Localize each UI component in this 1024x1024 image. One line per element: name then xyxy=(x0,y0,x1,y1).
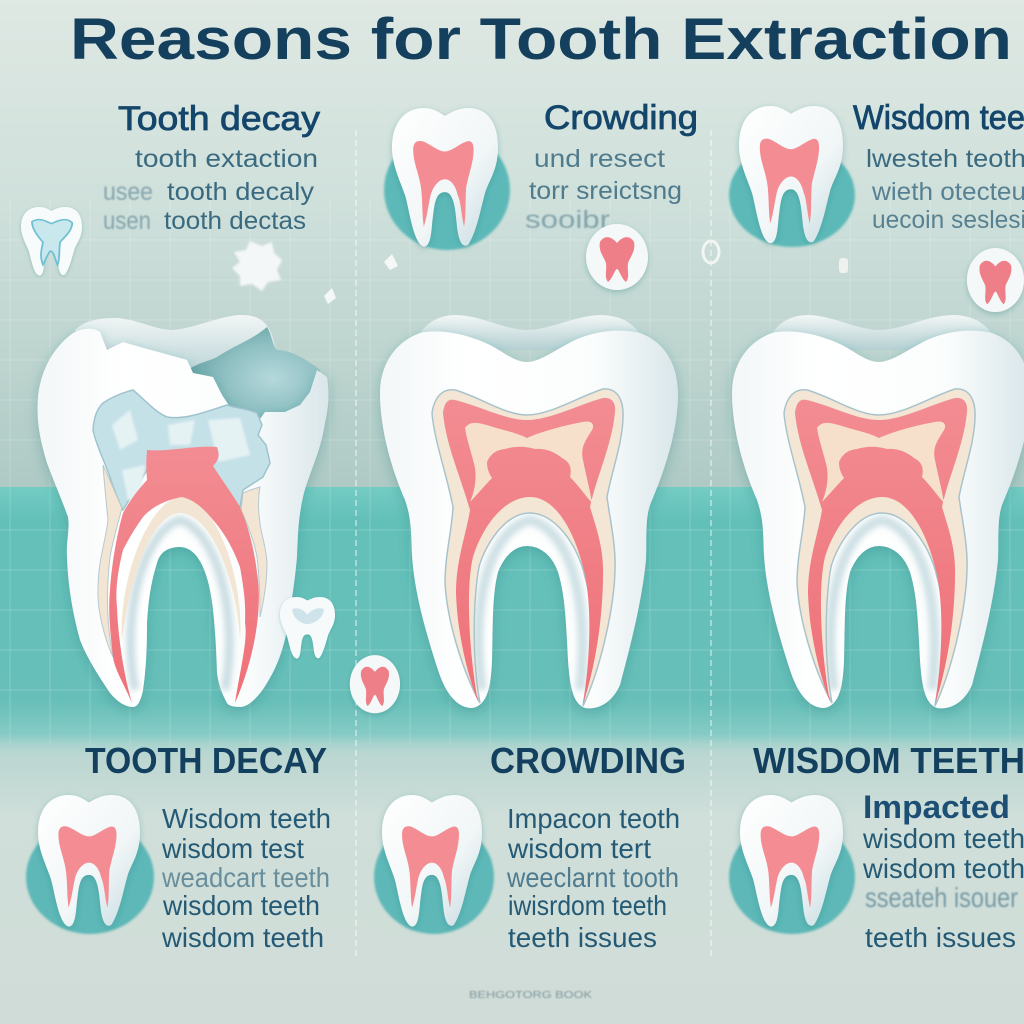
text: list: teeth issues xyxy=(865,922,1016,953)
heading: TOOTH DECAY: TOOTH DECAY xyxy=(85,740,327,781)
back crown xyxy=(75,315,285,380)
illustration: crowding tooth xyxy=(380,315,678,708)
text: crowding description: und resect xyxy=(534,145,665,173)
text: list: Wisdom teeth xyxy=(162,803,331,834)
icon: tooth with teal circle xyxy=(384,108,510,250)
inner arch shading xyxy=(131,520,229,690)
icon: small blue tooth xyxy=(21,207,82,276)
text: list: wisdom teoth xyxy=(862,853,1024,884)
text: list: weeclarnt tooth xyxy=(506,862,679,893)
heading: crowding: Crowding xyxy=(544,99,698,137)
text: crowding description: sooibr xyxy=(525,206,610,234)
text: wisdom teeth description: wieth otecteu xyxy=(871,178,1024,206)
text: list: wisdom teeth xyxy=(162,890,320,921)
decayed dentin region xyxy=(93,390,270,510)
text: wisdom teeth description xyxy=(866,145,1024,234)
panel: tooth decay top text xyxy=(103,100,320,235)
text: list: Impacon teoth xyxy=(507,803,680,834)
text: list: Impacted xyxy=(863,789,1010,825)
text: list xyxy=(862,789,1024,953)
pulp xyxy=(109,447,259,703)
text: crowding description xyxy=(525,145,682,234)
decay texture xyxy=(112,410,250,500)
heading: CROWDING: CROWDING xyxy=(490,740,686,781)
beige dentin slivers xyxy=(98,465,122,657)
tooth body xyxy=(37,329,328,707)
text: list: wisdom test xyxy=(161,833,304,864)
icon: small fragment xyxy=(384,254,398,270)
title: Reasons for Tooth Extraction xyxy=(70,7,1012,72)
text: wisdom teeth description: lwesteh teoth xyxy=(866,145,1024,173)
icon: tooth with teal circle xyxy=(729,106,855,247)
text: list xyxy=(506,803,680,953)
text: list: weadcart teeth xyxy=(161,862,330,893)
text: list: wisdom teeth xyxy=(862,823,1024,854)
panel: wisdom teeth lower xyxy=(729,740,1024,953)
icon: ring mark xyxy=(703,241,719,263)
icon: pink mini tooth xyxy=(586,224,648,290)
arch beige xyxy=(122,497,241,640)
icon: small white tooth xyxy=(280,597,335,659)
icon: pink mini tooth xyxy=(350,655,400,713)
panel: wisdom teeth top xyxy=(729,99,1024,247)
icon: tooth fragment xyxy=(232,241,282,291)
icon: small fragment xyxy=(324,288,336,304)
icon: small fragment xyxy=(839,258,848,273)
panel: tooth decay lower xyxy=(26,740,331,953)
text: tooth decay description: tooth dectas xyxy=(164,207,306,235)
footer text: BEHGOTORG BOOK xyxy=(469,990,592,1001)
text: list: teeth issues xyxy=(508,922,657,953)
text: tooth decay description xyxy=(103,145,318,235)
text: crowding description: torr sreictsng xyxy=(529,177,682,205)
icon: tooth xyxy=(374,795,494,934)
panel: crowding top xyxy=(384,99,698,250)
heading: tooth decay: Tooth decay xyxy=(118,100,320,138)
illustration: decayed tooth xyxy=(37,315,328,707)
panel: crowding lower xyxy=(374,740,686,953)
text: list xyxy=(161,803,331,953)
illustration: wisdom tooth xyxy=(732,315,1024,708)
text: tooth decay description: usee xyxy=(103,178,153,206)
icon: tooth xyxy=(26,795,154,934)
text: list: wisdom tert xyxy=(507,833,651,864)
text: tooth decay description: tooth extaction xyxy=(135,145,318,173)
decay cavity, upper right xyxy=(185,327,320,420)
text: tooth decay description: tooth decaly xyxy=(167,178,315,206)
text: list: iwisrdom teeth xyxy=(508,890,667,921)
teal band xyxy=(0,487,1024,762)
icon: pink mini tooth xyxy=(967,248,1024,312)
icon: tooth xyxy=(729,795,855,934)
text: list: wisdom teeth xyxy=(161,922,324,953)
text: tooth decay description: usen xyxy=(103,207,151,235)
